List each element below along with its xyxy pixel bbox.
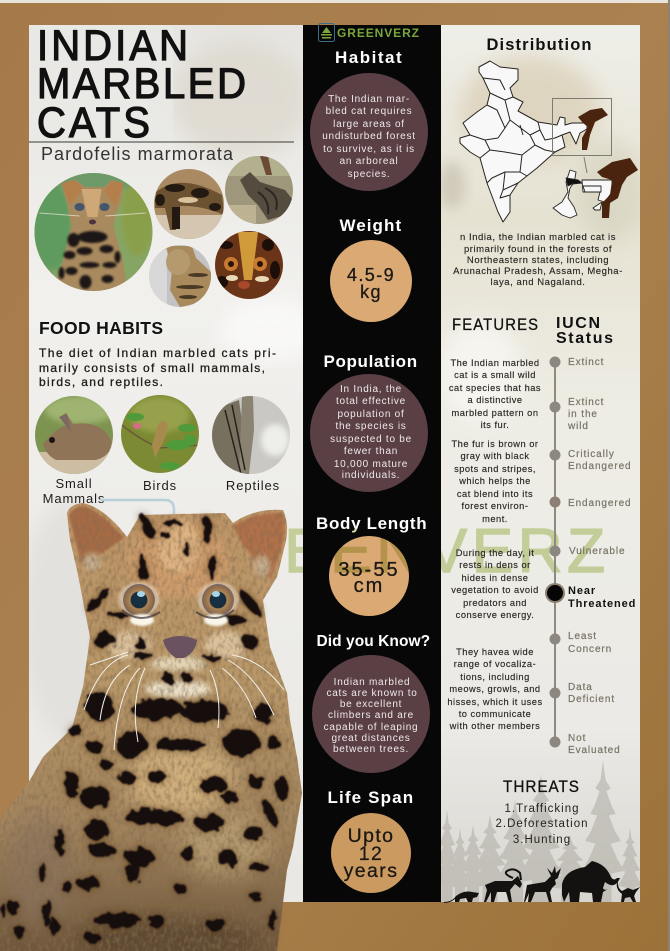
food labels: Small: [55, 476, 93, 491]
ibex: [484, 869, 522, 902]
life span value: Upto: [348, 825, 394, 847]
features text: They havea wide: [456, 647, 534, 657]
features text: its fur.: [481, 420, 509, 430]
threats: THREATS: [503, 777, 579, 796]
features text: hides in dense: [462, 573, 528, 583]
habitat text: an arboreal: [340, 156, 398, 167]
did you know text: between trees.: [333, 744, 409, 755]
body length value: [338, 559, 400, 597]
features text: conserve energy.: [456, 610, 534, 620]
photo: tabby kitten: [149, 245, 212, 307]
map: northeast enlargement highlight: [597, 158, 638, 218]
habitat text: undisturbed forest: [322, 131, 416, 142]
habitat text: The Indian mar-: [328, 94, 410, 105]
iucn labels: Near: [568, 585, 596, 597]
leopard: [444, 892, 479, 903]
features text: range of vocaliza-: [454, 659, 536, 669]
food habits text: marily consists of small mammals,: [39, 361, 265, 375]
cat markings: [0, 513, 288, 943]
features text: vegetation to avoid: [451, 585, 539, 595]
logo: greenverz: [318, 24, 419, 42]
iucn labels: wild: [567, 421, 589, 432]
photo: tabby on leaves: [225, 156, 293, 224]
heading: iucn status: [556, 315, 613, 347]
features text: marbled pattern on: [451, 408, 539, 418]
cat eyes: [118, 582, 239, 626]
distribution text: primarily found in the forests of: [464, 244, 612, 255]
features text: predators and: [463, 598, 527, 608]
photo: reptile: [212, 396, 290, 474]
food habits text: The diet of Indian marbled cats pri-: [39, 346, 276, 360]
iucn labels: [567, 357, 636, 756]
iucn timeline: [545, 356, 565, 748]
iucn labels: Extinct: [568, 357, 604, 368]
features text: [447, 358, 543, 731]
food labels: Mammals: [43, 491, 105, 506]
map: northeast highlight: [578, 108, 608, 150]
iucn labels: Concern: [568, 644, 612, 655]
heading: iucn status: Status: [556, 330, 613, 347]
heading: distribution: Distribution: [486, 36, 592, 54]
photo: cat on rocks: [154, 169, 224, 240]
food labels: Reptiles: [226, 478, 280, 493]
heading: food habits: FOOD HABITS: [39, 318, 163, 338]
features text: During the day, it: [456, 548, 534, 558]
features text: The Indian marbled: [450, 358, 540, 368]
did you know text: be excellent: [340, 699, 402, 710]
column headings: Habitat: [335, 48, 403, 67]
column headings: Life Span: [328, 788, 414, 807]
did you know text: [324, 677, 418, 755]
watermark: GREENVERZ: [182, 517, 605, 586]
panel: right background: [438, 25, 645, 902]
did you know text: cats are known to: [326, 688, 418, 699]
photo: large marbled cat portrait: [34, 173, 152, 291]
column headings: [316, 48, 432, 807]
title: CATS: [37, 98, 150, 146]
iucn labels: Endangered: [568, 461, 632, 472]
scientific name: Pardofelis marmorata: [41, 144, 234, 164]
life span value: 12: [359, 843, 383, 865]
animal silhouettes: [444, 861, 640, 903]
features text: to communicate: [459, 709, 531, 719]
population text: the species is: [335, 421, 407, 432]
title rule: [29, 142, 294, 143]
features text: spots and stripes,: [454, 464, 536, 474]
iucn labels: Threatened: [568, 598, 636, 610]
features text: cat is a small wild: [454, 370, 536, 380]
features text: ment.: [482, 514, 508, 524]
map: india: [460, 61, 587, 222]
map: northeast enlargement: [553, 170, 612, 218]
panel: black centre column: [303, 25, 441, 902]
iucn labels: in the: [568, 409, 598, 420]
monkey: [617, 880, 640, 902]
iucn labels: Least: [568, 631, 597, 642]
did you know text: great distances: [331, 733, 411, 744]
panel: left background: [20, 25, 320, 902]
food labels: Birds: [143, 478, 177, 493]
habitat text: to survive, as it is: [323, 144, 415, 155]
title: [37, 21, 246, 146]
life span value: [344, 825, 398, 882]
iucn labels: Critically: [568, 449, 615, 460]
photo: bird: [121, 395, 200, 473]
features text: a distinctive: [467, 395, 523, 405]
distribution text: Arunachal Pradesh, Assam, Megha-: [453, 266, 623, 277]
body length value: 35-55: [338, 559, 400, 581]
population text: total effective: [336, 396, 406, 407]
habitat text: large areas of: [333, 119, 405, 130]
food habits text: birds, and reptiles.: [39, 375, 163, 389]
features text: cat blend into its: [457, 489, 533, 499]
threats: 1.Trafficking: [504, 803, 580, 815]
features text: forest environ-: [462, 501, 528, 511]
cat nose: [163, 636, 197, 658]
population text: 10,000 mature: [334, 459, 408, 470]
features text: which helps the: [458, 476, 531, 486]
life span value: years: [344, 860, 398, 882]
cat whiskers: [84, 652, 284, 750]
features text: hisses, which it uses: [447, 697, 543, 707]
population text: fewer than: [344, 446, 398, 457]
features text: tions, including: [460, 672, 530, 682]
logo frame behind cat: [100, 500, 174, 520]
threats: [496, 777, 588, 846]
column headings: Body Length: [316, 514, 428, 533]
threats: 2.Deforestation: [496, 818, 588, 830]
population text: In India, the: [340, 384, 402, 395]
title: INDIAN: [37, 21, 188, 69]
column headings: Did you Know?: [316, 633, 432, 650]
iucn labels: Evaluated: [568, 745, 621, 756]
elephant: [562, 861, 620, 902]
iucn labels: Endangered: [568, 498, 632, 509]
iucn labels: Extinct: [568, 397, 604, 408]
iucn labels: Not: [568, 733, 586, 744]
did you know text: Indian marbled: [334, 677, 410, 688]
heading: iucn status: IUCN: [556, 315, 600, 332]
habitat text: bled cat requires: [326, 106, 412, 117]
weight value: kg: [360, 282, 382, 302]
features text: rests in dens or: [459, 560, 531, 570]
food habits text: [39, 346, 276, 389]
population text: suspected to be: [330, 434, 412, 445]
iucn labels: Vulnerable: [569, 546, 625, 557]
title: MARBLED: [37, 59, 246, 107]
distribution text: Northeastern states, including: [467, 255, 609, 266]
large cat photo: [0, 503, 302, 951]
habitat text: species.: [348, 169, 390, 180]
features text: cat species that has: [449, 383, 541, 393]
iucn labels: Data: [568, 682, 593, 693]
threats: 3.Hunting: [513, 834, 571, 846]
population text: population of: [337, 409, 405, 420]
iucn labels: Deficient: [568, 694, 615, 705]
body length value: cm: [354, 575, 384, 597]
weight value: 4.5-9: [347, 265, 395, 285]
food labels: [43, 476, 280, 506]
photo: small mammal: [35, 396, 115, 476]
population text: individuals.: [342, 470, 400, 481]
habitat text: [322, 94, 416, 180]
column headings: Population: [324, 352, 418, 371]
deer: [524, 866, 561, 902]
distribution text: [453, 232, 623, 288]
features text: gray with black: [460, 451, 530, 461]
weight value: [347, 265, 395, 302]
circles on dark column: [310, 73, 430, 893]
photo: painted cat face: [214, 231, 283, 299]
did you know text: climbers and are: [328, 710, 414, 721]
features text: meows, growls, and: [449, 684, 541, 694]
column headings: Weight: [340, 216, 402, 235]
logo: greenverz: GREENVERZ: [337, 26, 419, 40]
distribution text: laya, and Nagaland.: [491, 277, 585, 288]
features text: The fur is brown or: [451, 439, 539, 449]
features text: with other members: [449, 721, 540, 731]
map: locator box: [552, 98, 612, 173]
cat fur base: [0, 503, 302, 951]
heading: features: FEATURES: [452, 316, 538, 334]
distribution text: n India, the Indian marbled cat is: [460, 232, 616, 243]
did you know text: capable of leaping: [324, 722, 418, 733]
forest silhouette: [433, 760, 642, 902]
population text: [330, 384, 412, 481]
